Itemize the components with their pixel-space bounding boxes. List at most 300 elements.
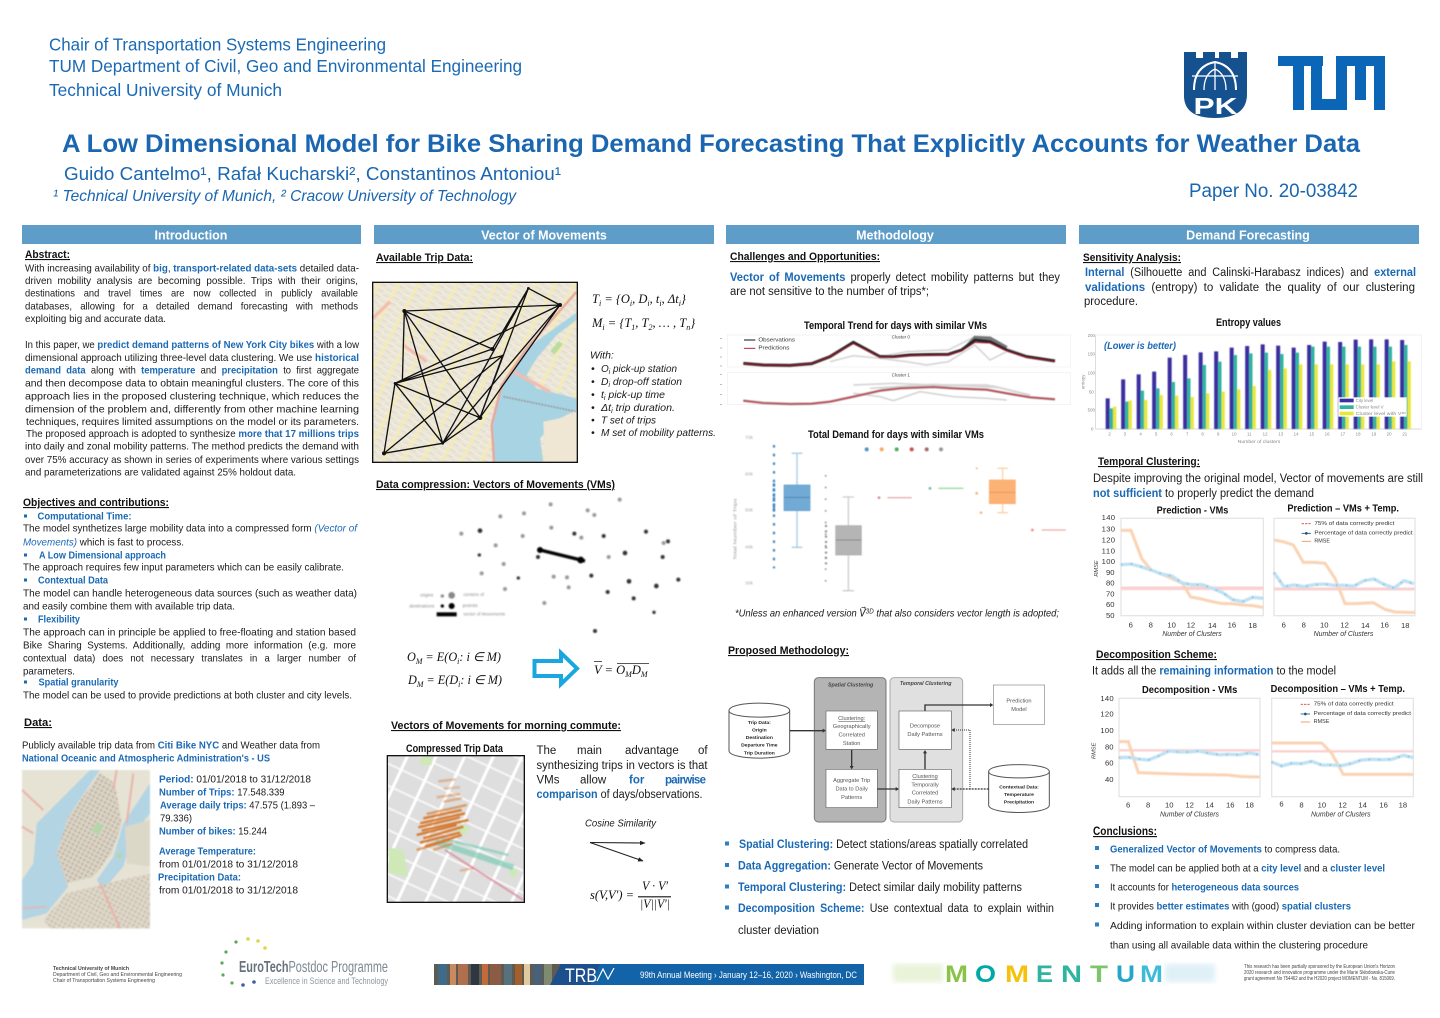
list: conclusions: Adding information to explain within cluster deviation can be better [1110,920,1415,932]
legend: RMSE [1314,539,1330,545]
list: notation: • [591,376,595,388]
legend labels: destinations [409,603,435,608]
text block: abstract: and then decompose data to obtain meaningful clusters. The core of this [25,378,359,390]
chart: entropy bars: 10 [1232,432,1237,437]
formula: vector definition: M [640,670,649,679]
chart: entropy bars: 0 [1091,427,1094,432]
arrow: cyan block arrow [534,653,577,684]
box: clustering stations: Geographically [833,724,871,730]
list: methodology steps: Decomposition Scheme: Use contextual data to explain within [738,903,1054,915]
chart: decomposition VMs: 8 [1146,800,1150,809]
list: notation: • [591,389,595,401]
text block: abstract: Abstract: [25,249,70,261]
panel: methodology [720,225,1071,937]
list: notation: T set of trips [601,414,657,426]
text block: pairwise comparison: The [536,745,556,757]
panel: spatial clustering: Spatial Clustering [828,683,874,689]
box: aggregate: Data to Daily [835,787,868,793]
subheading: decomposition scheme: Decomposition Scheme: [1096,649,1217,661]
text block: challenges: Vector of Movements properly detect mobility patterns but they [730,272,1060,284]
diagram: proposed methodology flow [729,678,1049,822]
chart: total demand box plots: Total Number of Trips [732,498,738,560]
box: clustering stations: Clustering: [838,716,866,722]
box: cluster grey [826,475,861,592]
text block: pairwise comparison: VMs [536,774,560,786]
legend: observations and predictions: Observations [758,337,795,343]
formula: vector definition: D [631,663,641,677]
text block: data facts: Number of Trips: 17.548.339 [159,786,285,798]
logo: EuroTech Postdoc Programme: Excellence in Science and Technology [265,976,388,986]
chart: entropy bars: Number of clusters [1238,439,1280,444]
formulas: trip and pattern definition: , Δt [662,292,679,306]
chart: decomposition VMs: 18 [1245,800,1254,809]
chart: entropy bars: 8 [1201,432,1204,437]
list: conclusions: It provides better estimates with (good) spatial clusters [1110,900,1351,912]
formulas: mean origin and destination: = E(D [423,673,458,687]
list: notation: trip duration. [613,402,675,414]
chart: decomposition VMs: Number of Clusters [1160,811,1219,818]
cylinder: trip data: Departure Time [741,743,778,749]
chart: decomposition VMs + Temp: 8 [1299,800,1304,809]
text block: objectives and contributions: Spatial granularity [38,676,119,688]
chart: prediction VMs: 70 [1106,589,1115,598]
chart: entropy bars: 19 [1371,432,1377,437]
banner: TRB annual meeting: 99th Annual Meeting › January 12–16, 2020 › Washington, DC [640,970,857,980]
caption: compressed trip data: Compressed Trip Data [406,743,504,755]
footnote: that also considers vector length is adopted; [874,608,1059,620]
chart: prediction VMs: 120 [1102,535,1115,544]
formulas: trip and pattern definition: T [592,292,599,306]
text block: data facts: Number of bikes: 15.244 [159,826,267,838]
box: temporal clustering: Correlated [912,791,938,797]
chart title: entropy: Entropy values [1216,317,1281,329]
chart: entropy bars: 13 [1278,432,1284,437]
text block: temporal clustering [1093,473,1423,500]
text block: abstract: approach lies in the proposed clustering technique, which reduces the [25,390,359,402]
legend: observations and predictions [744,337,795,351]
box: aggregate: Aggregate Trip [833,778,870,784]
chart: decomposition VMs + Temp: Decomposition – VMs + Temp. [1271,684,1405,695]
icon: PK logo [1184,52,1247,119]
box: clustering stations [826,711,877,749]
text block: data: Publicly available trip data from Citi Bike NYC and Weather data from [22,740,320,752]
logo: MOMENTUM [893,961,1215,988]
chart: prediction VMs: 12 [1187,620,1195,629]
chart: decomposition VMs: 14 [1205,800,1215,809]
list: methodology steps: cluster deviation [738,925,819,937]
logo: MOMENTUM: T [1090,961,1108,988]
chart: prediction VMs + Temp: 6 [1282,620,1286,629]
list: methodology steps [725,839,1054,937]
chart: decomposition VMs: 40 [1105,775,1114,784]
logo: MOMENTUM: O [975,961,996,988]
formulas: trip and pattern definition: = {O [601,292,630,306]
text block: objectives and contributions: The approach can in principle be applied to free-floating and station based [23,626,356,638]
header: institution: Technical University of Munich [49,80,282,100]
formulas: trip and pattern definition: 1 [631,323,635,332]
list: notation: i [609,369,611,376]
chart: entropy bars: 5 [1155,432,1158,437]
chart: entropy bars: 16 [1325,432,1330,437]
chart title: temporal trend: Temporal Trend for days with similar VMs [804,320,987,332]
list: notation: i [604,395,606,402]
heading: vector of movements: Vector of Movements [481,228,607,242]
formula: cosine similarity: s(V,V′) = [590,888,634,902]
chart: decomposition VMs: Decomposition - VMs [1142,685,1238,696]
logo: MOMENTUM: M [1140,961,1163,988]
text block: abstract: The proposed approach is adopted to synthesize more that 17 millions trips [26,428,359,440]
subheading: sensitivity analysis: Sensitivity Analysis: [1083,252,1181,264]
cylinder: trip data: Origin [752,728,767,734]
text block: abstract: driven mobility analysis are becoming possible. Trips with their origins, [25,275,358,287]
text block: objectives and contributions: and easily combine them with available trip data. [23,600,235,612]
chart: entropy bars: 12 [1263,432,1268,437]
text block: data facts: 79.336) [160,812,192,824]
text block: objectives and contributions: Objectives and contributions: [23,497,169,509]
chart: decomposition VMs + Temp: 10 [1318,800,1326,809]
box: temporal clustering: Daily Patterns [907,799,943,805]
text block: objectives and contributions: Flexibility [38,614,80,626]
cylinder: contextual data: Contextual Data: [999,784,1039,790]
text block: abstract: exploiting big and accurate data. [25,313,166,325]
formulas: mean origin and destination: i [457,657,459,666]
cylinder: trip data [729,703,790,758]
box: clustering stations: Station [843,741,860,747]
chart: entropy bars: 50 [1089,389,1094,394]
chart title: total demand: Total Demand for days with similar VMs [808,429,984,441]
chart: prediction VMs + Temp: 10 [1320,620,1329,629]
heading: methodology: Methodology [856,228,934,242]
legend: Cluster level with V³ᴰ [1356,411,1406,416]
chart: total demand box plots: 30k [745,580,754,586]
chart: decomposition VMs: 12 [1185,800,1194,809]
formulas: trip and pattern definition: i [659,299,662,308]
chart: temporal trend [720,335,1071,405]
chart: decomposition VMs: 10 [1165,800,1174,809]
chart: prediction VMs: 8 [1149,620,1153,629]
formulas: mean origin and destination: : i ∈ M) [460,673,502,687]
chart: prediction VMs: 100 [1102,557,1115,566]
chart: prediction VMs + Temp: Number of Clusters [1314,631,1374,638]
chart: entropy bars [1080,333,1422,444]
box: temporal clustering [899,769,951,808]
list: conclusions: than using all available data within the clustering procedure [1110,940,1368,952]
chart: entropy bars: 14 [1294,432,1299,437]
chart: decomposition VMs: 140 [1100,694,1114,703]
chart: entropy bars: 15 [1309,432,1315,437]
list: conclusions: Generalized Vector of Movements to compress data. [1110,844,1340,856]
legend: observations and predictions: Predictions [758,345,790,351]
icon: cosine similarity arrows [590,842,645,861]
text block: objectives and contributions: contextual data) does not necessary translates in a larger number of [23,652,356,664]
text block: pairwise comparison: synthesizing trips in vectors is that [536,760,708,772]
formulas: trip and pattern definition: , T [635,316,650,330]
text block: data facts: Average Temperature: [159,846,256,858]
chart: prediction VMs: Prediction - VMs [1157,506,1229,517]
chart: prediction VMs + Temp: 18 [1401,621,1410,630]
header: institution [49,34,522,100]
formulas: trip and pattern definition: 2 [648,323,652,332]
formulas: trip and pattern definition: i [602,323,605,332]
formula: cosine similarity: V · V′ [642,879,668,893]
footer: TUM address: Technical University of Munich [53,966,129,972]
map: trip network [373,282,577,462]
text block: pairwise comparison: for [629,774,645,786]
box: cluster orange [975,467,1015,514]
chart: entropy bars: 7 [1186,432,1189,437]
text block: sensitivity: validations (entropy) to validate the quality of our clustering [1085,282,1415,294]
list: notation: drop-off station [610,376,682,388]
list: notation: • [591,363,595,375]
formulas: trip and pattern definition: , … , T [652,316,687,330]
formulas: trip and pattern definition: i [647,299,650,308]
chart: prediction VMs: 130 [1102,524,1115,533]
legend labels: origins [420,592,434,597]
chart: prediction VMs: RMSE [1094,560,1100,577]
text block: objectives and contributions: The model can handle heterogeneous data sources (such as weather data) [23,588,357,600]
logo: MOMENTUM: N [1061,961,1082,988]
formula: vector definition [594,662,649,679]
text block: abstract: dimension of the problem and, differently from other machine learning [25,404,359,416]
text block: objectives and contributions: The approach requires few input parameters which can be easily calibrate. [23,562,344,574]
box: decompose [899,711,951,749]
cylinder: contextual data: Temperature [1004,792,1034,798]
chart: entropy bars: 20 [1387,432,1392,437]
chart: entropy bars: 2 [1108,432,1111,437]
paper number: Paper No. 20-03842 [1189,181,1358,202]
cylinder: trip data: Destination [746,735,773,741]
box: decompose: Daily Patterns [907,732,943,738]
annotation: lower is better: (Lower is better) [1104,340,1176,352]
banner: TRB annual meeting: TRB [565,966,597,987]
text block: abstract: With increasing availability of big, transport-related data-sets detailed data- [25,262,359,274]
legend [1302,521,1413,545]
title: A Low Dimensional Model for Bike Sharing Demand Forecasting That Explicitly Accounts for Weather Data [62,130,1361,158]
logo: EuroTech Postdoc Programme: EuroTechPostdoc Programme [239,959,388,976]
chart: prediction VMs + Temp: 8 [1302,620,1306,629]
formulas: trip and pattern definition: , t [650,292,660,306]
chart: total demand box plots: 50k [745,508,754,514]
logo: MOMENTUM: E [1036,961,1053,988]
text block: data facts: from 01/01/2018 to 31/12/2018 [159,858,298,870]
footer: funding note [1244,964,1395,982]
map: compressed trip data [387,756,524,902]
formulas: mean origin and destination: M [416,680,425,689]
box: prediction model: Model [1011,707,1027,713]
formulas: mean origin and destination: O [407,650,416,664]
chart: entropy bars: 11 [1247,432,1252,437]
list: methodology steps: Spatial Clustering: Detect stations/areas spatially correlated [739,839,1028,851]
legend labels: centers of [463,592,485,597]
text block: objectives and contributions: A Low Dimensional approach [39,550,166,562]
box: cluster blue [774,445,810,568]
text block: abstract: into daily and zonal mobility patterns. The method predicts the demand with [25,440,359,452]
chart: prediction VMs + Temp: Prediction – VMs + Temp. [1287,504,1399,515]
chart: prediction VMs: 60 [1106,600,1115,609]
box: aggregate [826,769,877,808]
chart: prediction VMs: 6 [1129,620,1133,629]
legend labels [409,592,506,617]
logo: MOMENTUM: M [945,961,968,988]
text block: data facts [158,774,315,896]
list: notation: • [591,427,595,439]
text block: pairwise comparison: main [577,745,602,757]
chart: entropy bars: 9 [1217,432,1220,437]
text block: abstract: databases, allowing for a detailed demand forecasting with methods [25,300,358,312]
chart: decomposition VMs: 16 [1226,800,1235,809]
legend [1301,701,1412,725]
formulas: mean origin and destination: D [408,673,417,687]
icon: PK logo: PK [1194,93,1238,119]
text block: pairwise comparison: comparison of days/observations. [536,789,702,801]
box: prediction model: Prediction [1006,698,1032,704]
text block: abstract [25,249,359,478]
list: notation: i [608,382,610,389]
chart: entropy bars: 100 [1088,370,1095,375]
text block: challenges [730,272,1060,298]
legend: Cluster level V [1356,405,1384,410]
legend [1338,397,1407,417]
list: notation: t [601,389,604,401]
legend: 75% of data correctly predict [1314,521,1395,527]
arrows: flow [790,705,991,789]
text block: abstract: dimensional approach utilizing three-level data clustering. We use historical [25,352,359,364]
formula: vector definition: V = O [594,663,625,677]
subheading: data compression: Data compression: Vectors of Movements (VMs) [376,479,615,491]
banner: TRB annual meeting [434,964,864,987]
list: notation: With: [590,350,614,362]
chart: prediction VMs + Temp: 12 [1340,620,1349,629]
text block: objectives and contributions: Contextual Data [38,574,108,586]
formulas: mean origin and destination: M [415,657,424,666]
text block: sensitivity: Internal (Silhouette and Calinski-Harabasz indices) and external [1085,267,1416,279]
text block: objectives and contributions: Movements) which is fast to process. [23,536,184,548]
header: institution: TUM Department of Civil, Geo and Environmental Engineering [49,56,522,76]
list: notation [590,350,716,439]
text block: data facts: Period: 01/01/2018 to 31/12/2018 [159,774,311,786]
cylinder: trip data: Trip Duration [744,750,775,756]
text block: abstract: techniques, requires limited assumptions on the model or its parameters. [26,416,359,428]
box: prediction model [993,685,1045,724]
chart: decomposition VMs [1091,685,1260,818]
panel: vector of movements [373,225,716,911]
box: temporal clustering: Clustering [912,774,938,780]
logo: MOMENTUM: M [1005,961,1029,988]
text block: temporal clustering: not sufficient to properly predict the demand [1093,488,1314,500]
text block: data [22,717,320,764]
formula: vector definition: M [624,670,633,679]
footer: funding note: This research has been partially sponsored by the European Union's Horizon [1244,964,1395,970]
chart: entropy bars: 18 [1356,432,1361,437]
network edges [384,288,560,453]
list: methodology steps: Temporal Clustering: Detect similar daily mobility patterns [738,882,1022,894]
footnote: 3D [866,608,874,616]
legend: Percentage of data correctly predict [1314,531,1413,537]
formulas: mean origin and destination: = E(O [422,650,457,664]
list: conclusions [1095,844,1415,952]
text block: data: Data: [24,717,52,729]
chart: entropy bars: 4 [1139,432,1142,437]
text block: objectives and contributions [23,497,358,702]
chart: prediction VMs: 50 [1106,611,1115,620]
formula: cosine similarity [590,879,671,911]
chart: temporal trend: Cluster 0 [892,335,911,340]
affiliations: ¹ Technical University of Munich, ² Cracow University of Technology [53,188,517,205]
text block: objectives and contributions: parameters. [23,666,75,678]
footnote: *Unless an enhanced version V⃗ [735,608,882,620]
chart: entropy bars: entropy [1080,374,1085,389]
list: notation: pick-up station [610,363,677,375]
header: institution: Chair of Transportation Systems Engineering [49,34,386,54]
formula: cosine similarity: |V||V′| [640,897,670,911]
cylinder: contextual data [989,765,1049,812]
chart: decomposition VMs: 120 [1100,709,1114,718]
text block: challenges: are not sensitive to the number of trips*; [730,286,929,298]
chart: decomposition VMs: RMSE [1091,742,1097,759]
subheading: proposed methodology: Proposed Methodology: [728,645,849,657]
chart: decomposition VMs + Temp: 18 [1399,800,1407,809]
text block: sensitivity: procedure. [1084,296,1138,308]
chart: decomposition VMs + Temp: 14 [1358,800,1368,809]
formulas: trip and pattern definition: , D [632,292,647,306]
heading: introduction: Introduction [155,228,227,242]
footer: funding note: 2020 research and innovation programme under the Marie Skłodowska-Curie [1244,970,1395,976]
formulas: trip and pattern definition: i [630,299,632,308]
chart: temporal trend: Cluster 1 [892,373,911,378]
text block: abstract: over 75% accuracy as shown in series of experiments where various settings [25,454,359,466]
legend labels: points [463,603,478,608]
text block: decomposition: It adds all the remaining information to the model [1092,666,1336,678]
formulas: trip and pattern definition: i [599,299,601,308]
chart: decomposition VMs: 6 [1126,800,1130,809]
chart: prediction VMs + Temp: 16 [1380,620,1389,629]
box: aggregate: Patterns [841,795,862,801]
panel: temporal clustering: Temporal Clustering [900,681,952,687]
text block: data facts: Precipitation Data: [158,872,241,884]
text block: data facts: Average daily trips: 47.575 (1.893 – [160,800,315,812]
footer: TUM address: Department of Civil, Geo and Environmental Engineering [53,972,182,978]
text block: pairwise comparison [536,745,708,801]
cylinder: contextual data: Precipitation [1004,799,1034,805]
panel: demand forecasting [1079,225,1423,952]
legend: City level [1356,398,1373,403]
list: methodology steps: Data Aggregation: Generate Vector of Movements [738,860,983,872]
chart: entropy bars: 500 [1088,408,1095,413]
text block: objectives and contributions: Computational Time: [38,510,132,522]
chart: entropy bars: 3 [1124,432,1127,437]
chart: prediction VMs: 16 [1228,620,1236,629]
heading: methodology [726,225,1066,244]
chart: entropy bars: 200 [1088,333,1095,338]
chart: decomposition VMs: 60 [1105,759,1114,768]
list: notation: pick-up time [605,389,665,401]
icon: TUM logo [1278,56,1385,110]
logo: EuroTech Postdoc Programme [220,937,388,987]
footer: TUM address [53,966,182,984]
chart: prediction VMs: 90 [1106,568,1115,577]
list: notation: • [591,414,595,426]
legend: Percentage of data correctly predict [1314,711,1412,717]
chart: prediction VMs: 14 [1208,621,1217,630]
chart: total demand box plots: 40k [745,544,754,550]
text block: abstract: demand data along with temperature and precipitation to first aggregate [25,364,359,376]
chart: decomposition VMs + Temp [1271,684,1413,818]
panel: spatial clustering [814,678,886,822]
text block: pairwise comparison: of [698,745,708,757]
subheading: available trip data: Available Trip Data: [376,252,473,264]
logo: MOMENTUM: U [1116,961,1135,988]
chart: decomposition VMs + Temp: Number of Clusters [1311,811,1371,818]
